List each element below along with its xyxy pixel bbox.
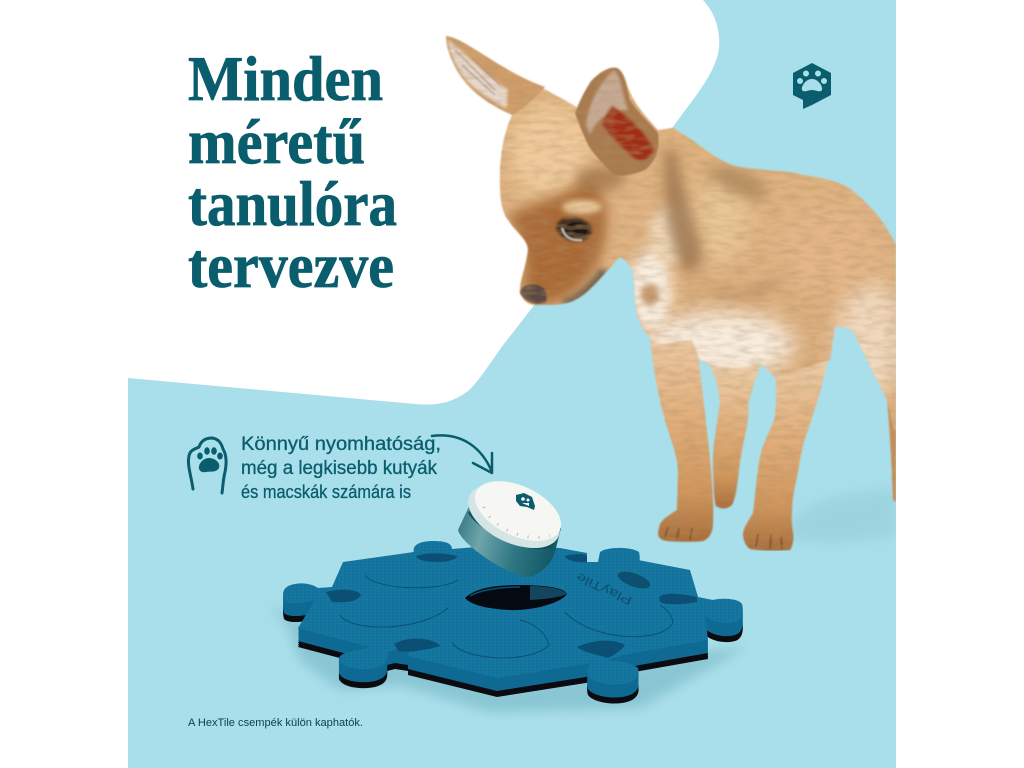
callout text: Könnyű nyomhatóság, [241, 434, 441, 455]
dog: front right leg [743, 330, 835, 551]
dog: body and head [498, 67, 896, 430]
tile: black underside [283, 556, 743, 704]
callout text: és macskák számára is [241, 481, 411, 502]
dog: eye [554, 214, 594, 244]
dog: right ear [575, 68, 659, 175]
tile: embossed circles [340, 575, 673, 658]
callout text: még a legkisebb kutyák [241, 458, 437, 479]
dog: rear leg lower [887, 400, 896, 502]
dog: left ear [446, 36, 545, 115]
callout text [241, 434, 441, 502]
cup: body [458, 500, 561, 577]
button cup [458, 469, 570, 577]
cup: white lid [466, 469, 570, 553]
tile: side wall [283, 542, 743, 698]
panel: light blue background [128, 0, 896, 768]
tile: brand mark [574, 568, 652, 608]
cup: lid logo [516, 493, 535, 510]
title: tanulóra [188, 168, 397, 239]
panel: white organic shape [128, 0, 719, 405]
icon: brand logo [793, 63, 831, 109]
dog: far hind leg [708, 362, 762, 510]
tile: centre hole [465, 585, 567, 610]
icon: paw [188, 438, 226, 493]
cup: lip [458, 471, 570, 561]
dog: front left leg [635, 300, 713, 542]
puzzle tile [283, 541, 743, 704]
tile: notches [326, 553, 697, 658]
infographic [128, 0, 896, 768]
footnote: A HexTile csempék külön kaphatók. [188, 717, 363, 729]
cup: rim [468, 500, 560, 549]
dog: rear leg [830, 280, 896, 502]
title: Minden [188, 43, 383, 114]
title [188, 43, 397, 301]
dog shadow [793, 490, 894, 542]
title: méretű [188, 106, 365, 177]
tile shadow [268, 606, 750, 712]
dog: nose [520, 284, 547, 304]
arrow [432, 435, 492, 473]
dog photo [440, 30, 904, 551]
tile: top surface [283, 541, 743, 685]
dog: brown muzzle shading [508, 180, 607, 305]
title: tervezve [188, 230, 394, 301]
tile: brand mark: PlayTile [574, 570, 634, 608]
